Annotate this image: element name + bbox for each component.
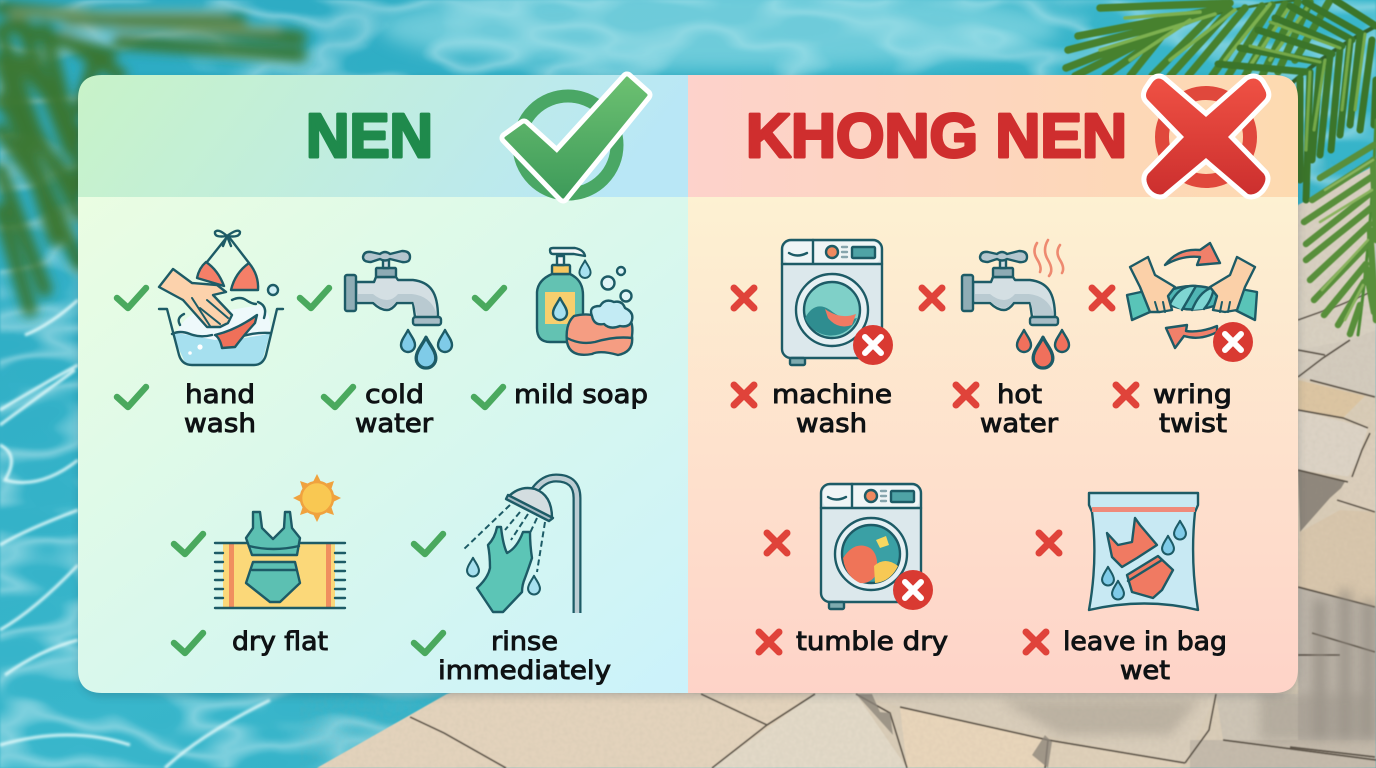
background: blurred palm frond top left <box>0 8 300 310</box>
icon: label check <box>174 633 203 653</box>
label: cold water: water <box>355 409 433 439</box>
icon: label check <box>414 633 443 653</box>
label: rinse immediately <box>438 627 611 686</box>
icon: label cross <box>734 385 754 405</box>
item: tumble dry <box>759 484 948 657</box>
label: machine wash <box>772 380 892 439</box>
icon: small check <box>117 288 146 308</box>
icon: label check <box>474 387 503 407</box>
icon: cold faucet <box>345 251 452 368</box>
icon: towel with bikini and sun <box>215 474 345 608</box>
label: dry flat: dry flat <box>232 627 328 657</box>
item: leave in bag wet <box>1026 493 1227 686</box>
icon: label check <box>117 387 146 407</box>
label: hand wash <box>184 380 256 439</box>
item: hot water <box>922 240 1069 439</box>
label: machine wash: machine <box>772 380 892 410</box>
heading: KHONG NEN: KHONG NEN <box>746 102 1127 171</box>
icon: small check <box>174 534 203 554</box>
icon: soap bottle and sponge <box>537 248 632 355</box>
panel: left NEN header <box>78 75 688 197</box>
label: rinse immediately: immediately <box>438 656 611 686</box>
label: wring twist: twist <box>1159 409 1227 439</box>
panel: main card <box>78 75 1299 697</box>
label: tumble dry: tumble dry <box>796 627 948 657</box>
icon: small check <box>475 288 504 308</box>
panel: left NEN body <box>78 197 688 693</box>
item: hand wash <box>117 231 283 439</box>
label: hot water <box>980 380 1058 439</box>
icon: small cross <box>922 288 942 308</box>
icon: small check <box>300 288 329 308</box>
label: cold water <box>355 380 433 439</box>
icon: tumble dryer <box>821 484 933 610</box>
icon: small cross <box>767 533 787 553</box>
label: leave in bag wet <box>1063 627 1227 686</box>
icon: shower and swimsuit <box>463 478 577 613</box>
panel: right KHONG NEN body <box>688 197 1298 693</box>
heading: NEN: NEN <box>306 102 433 171</box>
icon: basin with hand and bikini <box>159 231 283 365</box>
item: mild soap <box>474 248 648 410</box>
label: hand wash: wash <box>184 409 256 439</box>
icon: label cross <box>956 385 976 405</box>
icon: small check <box>414 534 443 554</box>
icon: big red cross <box>1146 79 1266 194</box>
item: rinse immediately <box>414 478 611 686</box>
background: palm shadows on stone <box>1000 590 1376 740</box>
item: dry flat <box>174 474 345 657</box>
icon: wet swimsuit in sealed bag <box>1089 493 1198 610</box>
label: hand wash: hand <box>185 380 255 410</box>
icon: label check <box>324 387 353 407</box>
icon: small cross <box>734 288 754 308</box>
label: mild soap: mild soap <box>514 380 648 410</box>
icon: small cross <box>1039 533 1059 553</box>
icon: hands wringing fabric <box>1127 243 1257 362</box>
label: wring twist <box>1153 380 1232 439</box>
icon: big green check <box>506 78 646 197</box>
background: stone patio <box>300 160 1376 768</box>
icon: label cross <box>759 632 779 652</box>
label: cold water: cold <box>365 380 424 410</box>
label: hot water: water <box>980 409 1058 439</box>
label: leave in bag wet: leave in bag <box>1063 627 1227 657</box>
icon: small cross <box>1092 288 1112 308</box>
item: cold water <box>300 251 452 439</box>
icon: label cross <box>1026 632 1046 652</box>
icon: hot faucet with steam <box>962 240 1069 368</box>
label: rinse immediately: rinse <box>491 627 558 657</box>
item: machine wash <box>734 240 893 439</box>
label: leave in bag wet: wet <box>1120 656 1170 686</box>
label: machine wash: wash <box>796 409 867 439</box>
item: wring twist <box>1092 243 1257 439</box>
background: palm fronds top right <box>1066 0 1376 335</box>
panel: right KHONG NEN header <box>688 75 1298 197</box>
label: hot water: hot <box>997 380 1042 410</box>
icon: washing machine <box>782 240 893 365</box>
label: wring twist: wring <box>1153 380 1232 410</box>
icon: label cross <box>1116 385 1136 405</box>
